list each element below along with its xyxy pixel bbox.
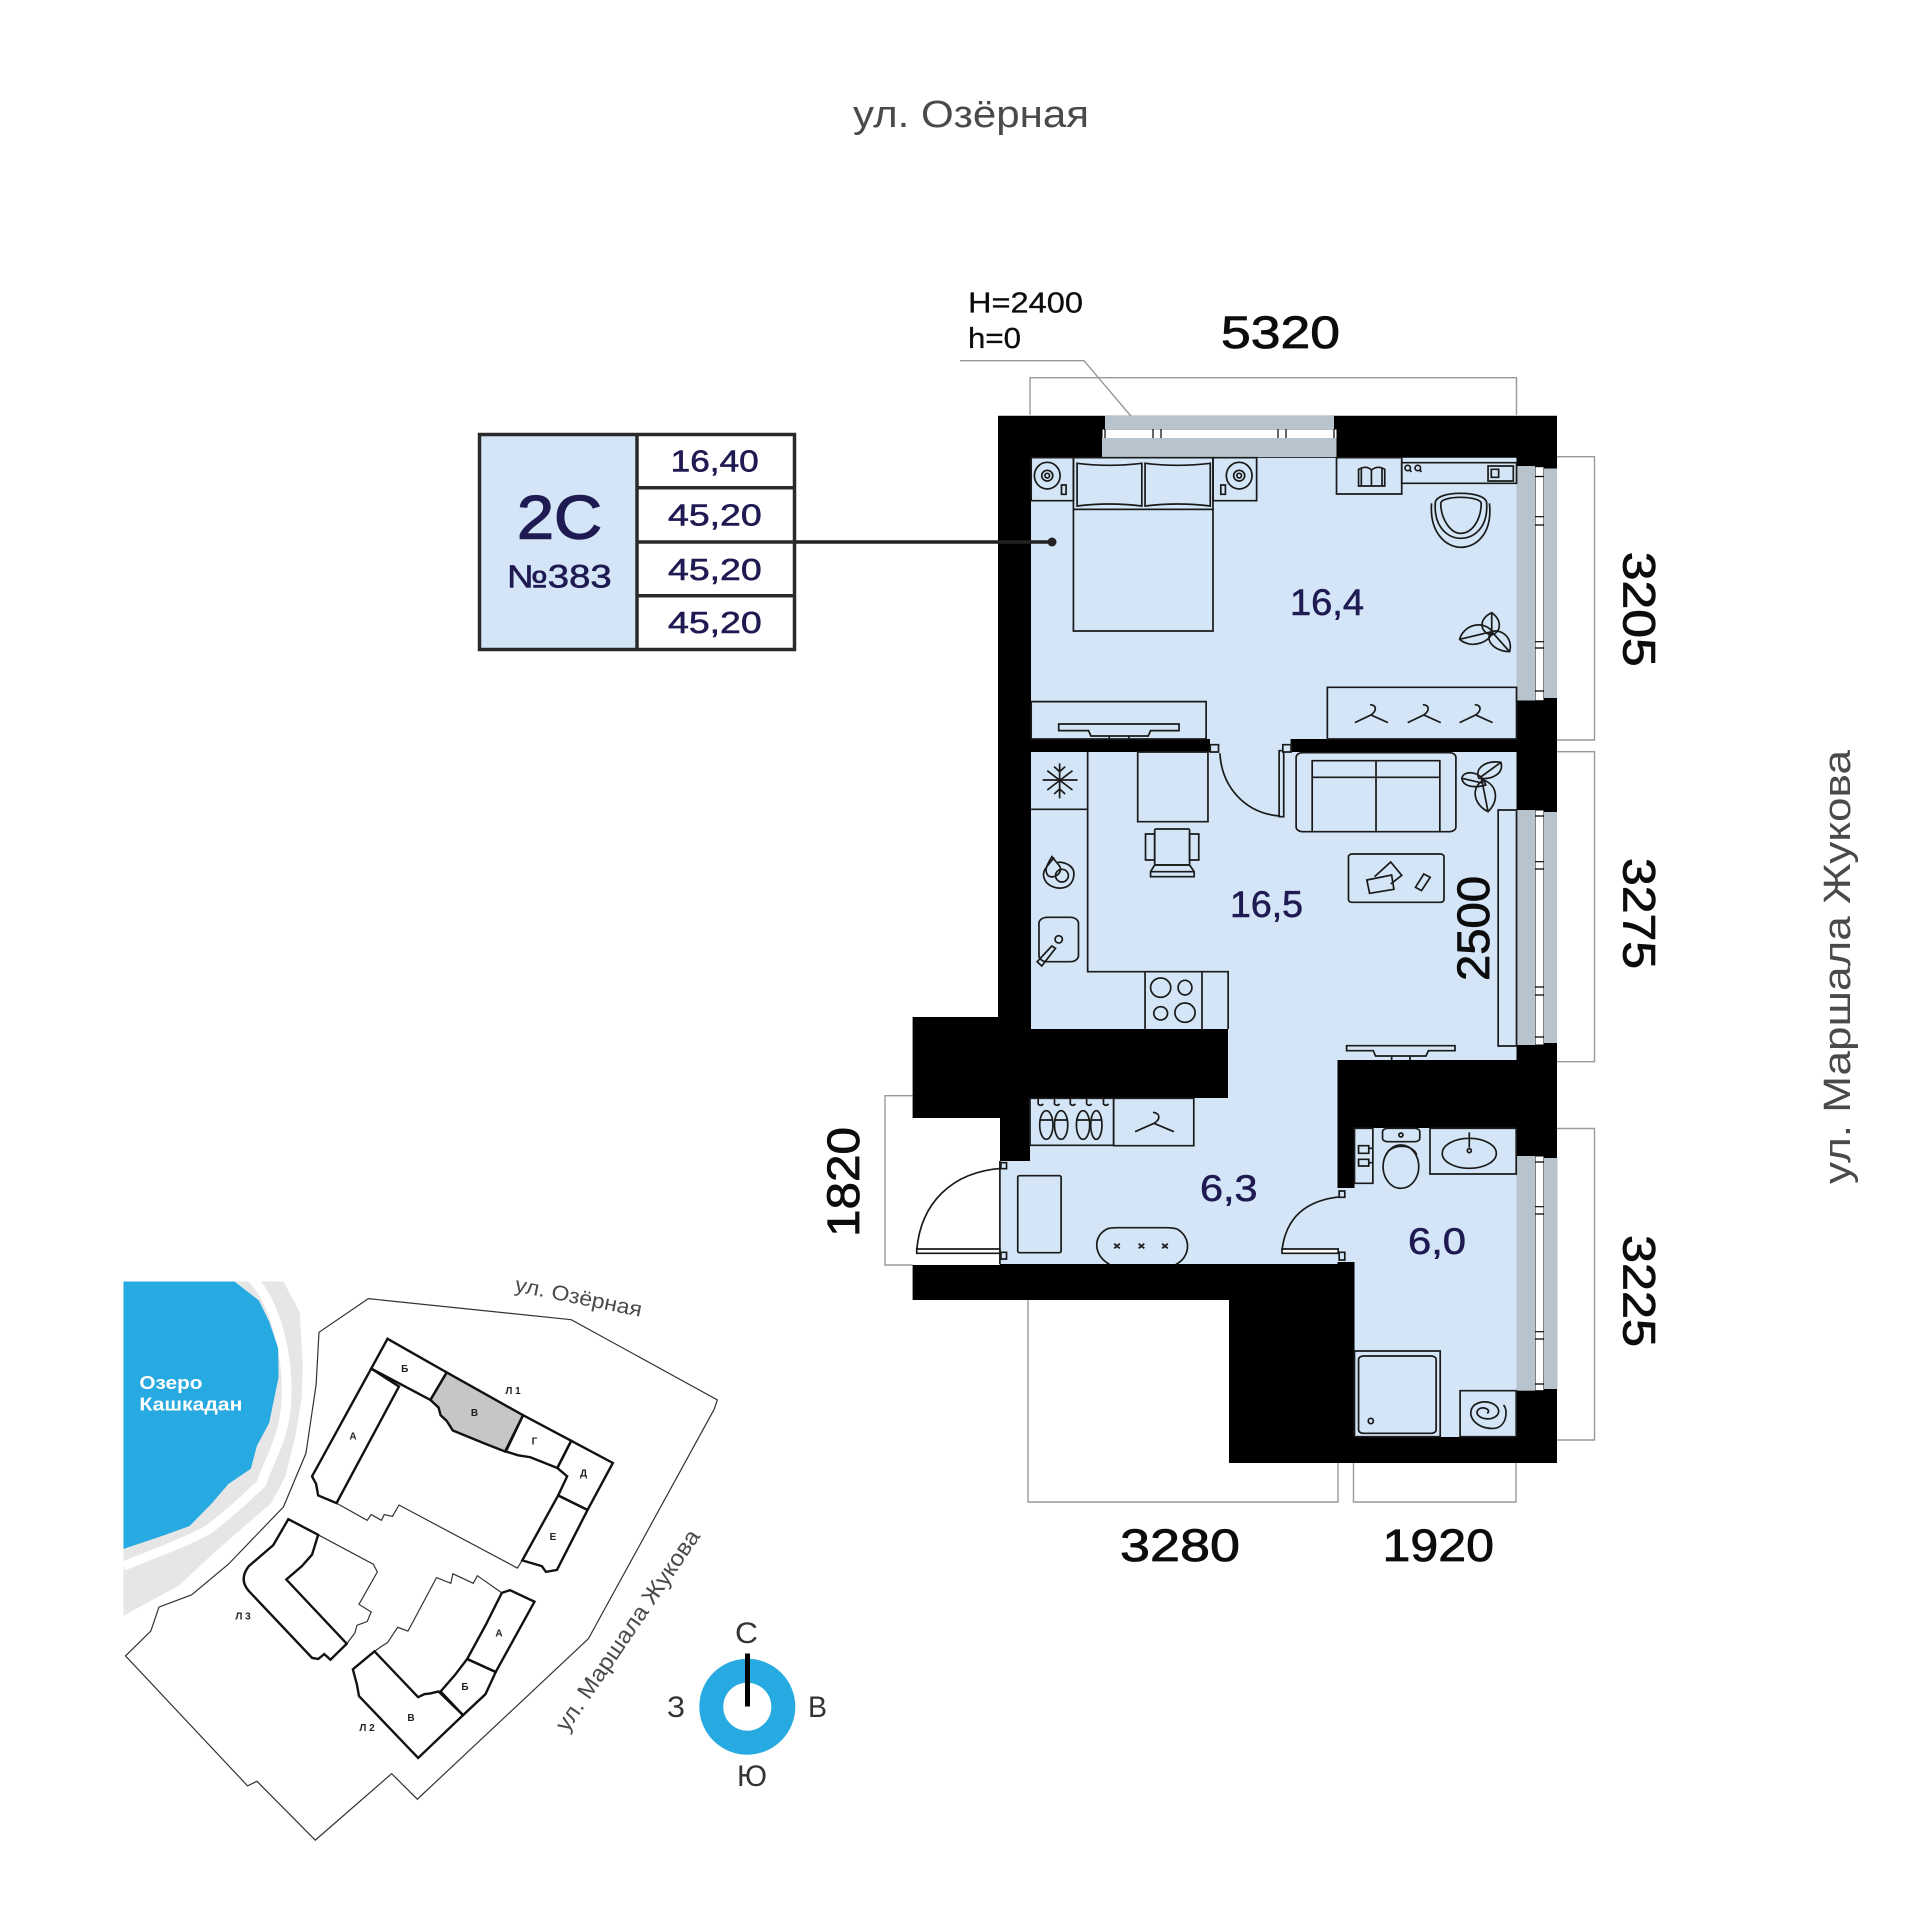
dimension: 1920: 1920 — [1382, 1520, 1494, 1571]
apartment number: №383 — [507, 559, 612, 595]
bed — [1073, 458, 1213, 631]
compass letters: С — [735, 1617, 758, 1650]
hallway and bathroom furniture — [917, 1098, 1516, 1437]
building section labels: Д — [580, 1468, 587, 1480]
book table — [1337, 458, 1402, 494]
ottoman — [1097, 1228, 1188, 1264]
apartment walls — [913, 416, 1557, 1463]
TV unit — [1031, 702, 1206, 739]
building section labels: Л 1 — [505, 1386, 521, 1397]
window: bedroom — [1516, 466, 1557, 701]
compass needle — [745, 1654, 750, 1706]
compass letters — [667, 1617, 827, 1793]
room area: hallway: 6,3 — [1200, 1168, 1258, 1209]
towel rack — [1354, 1128, 1373, 1183]
lake name: Озеро — [139, 1373, 202, 1393]
window: bathroom — [1516, 1156, 1558, 1391]
washing machine with spiral — [1460, 1391, 1516, 1437]
apartment type: 2С — [517, 483, 602, 551]
kitchen counter outline — [1031, 752, 1228, 1029]
street label: right: ул. Маршала Жукова — [1817, 749, 1859, 1184]
shoe closet — [1030, 1098, 1114, 1145]
room area: bathroom: 6,0 — [1408, 1221, 1466, 1262]
building section labels: А — [495, 1628, 503, 1640]
lake and shoreline — [123, 1278, 303, 1616]
washbasin — [1430, 1128, 1516, 1174]
building L3 — [244, 1519, 377, 1660]
room area: living room: 16,5 — [1230, 884, 1303, 925]
plant — [1460, 613, 1510, 652]
icon: dish and drop — [1043, 857, 1074, 888]
right nightstand — [1213, 458, 1257, 501]
building section labels: Л 3 — [235, 1612, 251, 1622]
toilet — [1383, 1128, 1420, 1188]
wardrobe with hangers — [1327, 687, 1517, 739]
table values: 45,20 — [668, 498, 762, 533]
coffee table — [1348, 854, 1444, 902]
table values — [668, 444, 762, 640]
dimension: 3275: 3275 — [1614, 858, 1664, 969]
building section labels: Б — [401, 1364, 408, 1375]
TV stand — [1347, 1046, 1455, 1060]
desk chair — [1146, 829, 1199, 877]
bathroom door — [1282, 1191, 1345, 1260]
window sill — [1498, 810, 1517, 1046]
armchair — [1431, 493, 1490, 547]
building section labels: А — [349, 1432, 357, 1442]
compass letters: З — [667, 1691, 685, 1724]
map street label: Ozernaya: ул. Озёрная — [513, 1273, 644, 1322]
left nightstand — [1031, 458, 1073, 501]
building section labels: Е — [550, 1532, 557, 1543]
dimension: 3225: 3225 — [1614, 1235, 1664, 1347]
icon: freezer snowflake — [1043, 763, 1078, 798]
dimension: 1820: 1820 — [818, 1127, 869, 1237]
door mat — [1018, 1176, 1061, 1253]
shower — [1354, 1351, 1440, 1437]
desk — [1138, 752, 1208, 822]
building section labels — [235, 1364, 587, 1734]
bedroom door — [1210, 745, 1291, 817]
table values: 45,20 — [668, 552, 762, 587]
dimension: 5320: 5320 — [1221, 307, 1340, 358]
dimension: 2500: 2500 — [1448, 876, 1499, 981]
icon: kitchen sink — [1037, 917, 1078, 966]
compass ring — [711, 1671, 783, 1743]
lake name — [139, 1373, 242, 1415]
building L2 — [353, 1574, 534, 1758]
dimension: 3280: 3280 — [1120, 1520, 1240, 1571]
apartment floor: bathroom — [1338, 1128, 1516, 1437]
coat closet — [1114, 1098, 1194, 1146]
dimension: 3205: 3205 — [1614, 552, 1664, 667]
site map — [123, 1273, 717, 1840]
apartment info table — [480, 434, 795, 650]
map street label: Marshala Zhukova: ул. Маршала Жукова — [550, 1524, 705, 1736]
entrance door — [917, 1161, 1007, 1264]
building section labels: Г — [532, 1436, 538, 1448]
compass — [667, 1617, 827, 1793]
window height note — [968, 288, 1083, 355]
bedroom furniture — [1031, 458, 1517, 739]
plant — [1462, 762, 1501, 812]
table values: 16,40 — [671, 444, 759, 479]
compass letters: В — [808, 1691, 827, 1724]
apartment floor: bedroom, living room, hallway — [1000, 458, 1516, 1264]
building section labels: Б — [461, 1682, 469, 1693]
compass letters: Ю — [737, 1760, 767, 1793]
street label: top: ул. Озёрная — [853, 94, 1089, 136]
leader line from table to plan — [795, 538, 1056, 546]
window: top — [1102, 416, 1337, 457]
lake name: Кашкадан — [139, 1395, 242, 1415]
room area: bedroom: 16,4 — [1290, 582, 1364, 623]
building section labels: Л 2 — [359, 1723, 375, 1734]
window height note: h=0 — [968, 323, 1021, 355]
dresser shelf — [1402, 463, 1517, 483]
hob — [1151, 978, 1195, 1022]
sofa — [1296, 753, 1456, 832]
site boundary — [126, 1299, 717, 1840]
building section labels: В — [407, 1713, 415, 1724]
table values: 45,20 — [668, 605, 762, 640]
dimension guide lines — [885, 361, 1594, 1502]
building L1 — [312, 1339, 613, 1572]
window: living room — [1516, 810, 1557, 1045]
window height note: H=2400 — [968, 288, 1083, 320]
kitchen and living room furniture — [1031, 745, 1517, 1060]
building section labels: В — [471, 1408, 478, 1419]
